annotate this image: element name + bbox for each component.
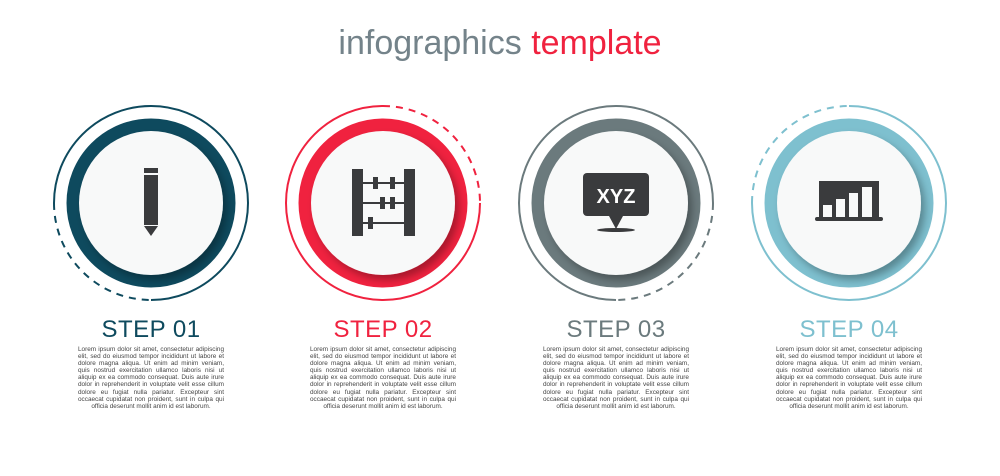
step 2 text: Lorem ipsum dolor sit amet, consectetur adipiscing elit, sed do eiusmod tempor incididunt ut labore et dolore magna aliqua. Ut enim ad minim veniam, quis nostrud exercitation ullamco laboris nisi ut aliquip ex ea commodo consequat. Duis aute irure dolor in reprehenderit in voluptate velit esse cillum dolore eu fugiat nulla pariatur. Excepteur sint occaecat cupidatat non proident, sunt in culpa qui officia deserunt mollit anim id est laborum.: [310, 346, 456, 410]
title: infographics template: [338, 24, 662, 62]
step 3 text: Lorem ipsum dolor sit amet, consectetur adipiscing elit, sed do eiusmod tempor incididunt ut labore et dolore magna aliqua. Ut enim ad minim veniam, quis nostrud exercitation ullamco laboris nisi ut aliquip ex ea commodo consequat. Duis aute irure dolor in reprehenderit in voluptate velit esse cillum dolore eu fugiat nulla pariatur. Excepteur sint occaecat cupidatat non proident, sunt in culpa qui officia deserunt mollit anim id est laborum.: [543, 346, 689, 410]
icon: abacus: [352, 169, 415, 236]
step 2 circle: [286, 106, 480, 300]
step 4 circle: [752, 106, 946, 300]
step 1 heading: STEP 01: [101, 316, 201, 343]
step 3 heading: STEP 03: [566, 316, 666, 343]
icon: laptop chart: [815, 181, 883, 221]
step 4 heading: STEP 04: [799, 316, 899, 343]
step 3 circle: [519, 106, 713, 300]
step 2 heading: STEP 02: [333, 316, 433, 343]
step 1 circle: [54, 106, 248, 300]
icon: xyz speech bubble: [583, 173, 649, 232]
icon: xyz speech bubble: XYZ: [597, 186, 635, 208]
step 4 text: Lorem ipsum dolor sit amet, consectetur adipiscing elit, sed do eiusmod tempor incididunt ut labore et dolore magna aliqua. Ut enim ad minim veniam, quis nostrud exercitation ullamco laboris nisi ut aliquip ex ea commodo consequat. Duis aute irure dolor in reprehenderit in voluptate velit esse cillum dolore eu fugiat nulla pariatur. Excepteur sint occaecat cupidatat non proident, sunt in culpa qui officia deserunt mollit anim id est laborum.: [776, 346, 922, 410]
icon: pencil: [144, 168, 158, 236]
step 1 text: Lorem ipsum dolor sit amet, consectetur adipiscing elit, sed do eiusmod tempor incididunt ut labore et dolore magna aliqua. Ut enim ad minim veniam, quis nostrud exercitation ullamco laboris nisi ut aliquip ex ea commodo consequat. Duis aute irure dolor in reprehenderit in voluptate velit esse cillum dolore eu fugiat nulla pariatur. Excepteur sint occaecat cupidatat non proident, sunt in culpa qui officia deserunt mollit anim id est laborum.: [78, 346, 224, 410]
